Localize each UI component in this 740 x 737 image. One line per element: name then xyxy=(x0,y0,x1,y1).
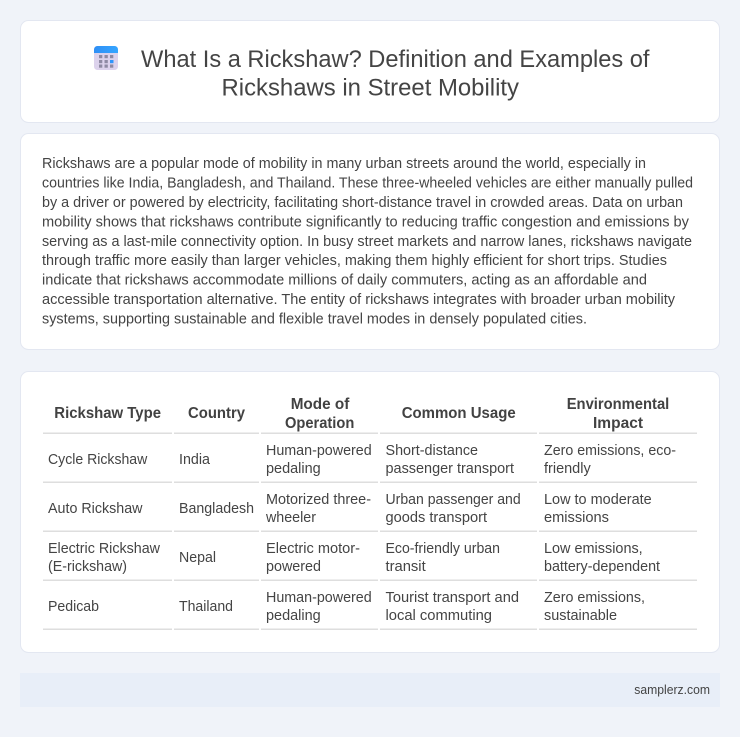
table row: cycle rickshaw: Short-distance xyxy=(386,443,478,459)
table row: pedicab: pedaling xyxy=(266,608,321,624)
panel: description card xyxy=(20,134,720,350)
text block: description: serving as a last-mile connectivity option. In busy street markets and narrow lanes, rickshaws navigate xyxy=(42,234,692,250)
table row: electric rickshaw: Electric Rickshaw xyxy=(48,541,161,557)
table row: pedicab xyxy=(43,590,697,630)
table row: electric rickshaw: Electric motor- xyxy=(266,541,360,557)
text block: description: accessible transportation alternative. The entity of rickshaws integrates with broader urban mobility xyxy=(42,292,676,308)
table row: pedicab: Pedicab xyxy=(48,599,99,615)
table row: cycle rickshaw: Zero emissions, eco- xyxy=(544,443,676,459)
table row: pedicab: Human-powered xyxy=(266,590,372,606)
table row: pedicab: local commuting xyxy=(386,608,492,624)
table row: cycle rickshaw: friendly xyxy=(544,461,592,477)
table row: auto rickshaw xyxy=(43,492,697,532)
table row: pedicab: sustainable xyxy=(544,608,617,624)
text block: description: countries like India, Bangladesh, and Thailand. These three-wheeled vehicles are either manually pulled xyxy=(42,175,693,191)
table row: cycle rickshaw: Human-powered xyxy=(266,443,372,459)
title: Rickshaws in Street Mobility xyxy=(222,74,519,102)
footer bar xyxy=(20,673,720,707)
table header row: Mode of xyxy=(291,396,350,413)
table header row: Operation xyxy=(285,415,354,432)
table row: auto rickshaw: goods transport xyxy=(386,510,487,526)
table row: cycle rickshaw: passenger transport xyxy=(386,461,514,477)
table header row: Environmental xyxy=(567,396,669,413)
table row: cycle rickshaw: Cycle Rickshaw xyxy=(48,452,148,468)
table row: cycle rickshaw: pedaling xyxy=(266,461,321,477)
table row: electric rickshaw: Eco-friendly urban xyxy=(386,541,500,557)
table row: electric rickshaw: transit xyxy=(386,559,426,575)
title: What Is a Rickshaw? Definition and Examples of xyxy=(141,46,650,73)
table row: auto rickshaw: emissions xyxy=(544,510,609,526)
text block: description: through traffic more easily than larger vehicles, making them highly efficient for short trips. Studies xyxy=(42,253,667,269)
table row: pedicab: Zero emissions, xyxy=(544,590,645,606)
table row: cycle rickshaw: India xyxy=(179,452,210,468)
table row: auto rickshaw: Urban passenger and xyxy=(386,492,521,508)
table header row: Rickshaw Type xyxy=(54,405,161,422)
table header row xyxy=(43,396,697,434)
text block: description: by a driver or powered by electricity, facilitating short-distance travel in crowded areas. Data on urban xyxy=(42,195,683,211)
icon: calendar xyxy=(94,46,118,70)
table row: electric rickshaw: (E-rickshaw) xyxy=(48,559,127,575)
text block: description: systems, supporting sustainable and flexible travel modes in densely populated cities. xyxy=(42,312,587,328)
table row: electric rickshaw xyxy=(43,541,697,581)
panel: header card xyxy=(20,20,720,122)
table row: electric rickshaw: powered xyxy=(266,559,321,575)
text block: description: mobility shows that rickshaws contribute significantly to reducing traffic congestion and emissions by xyxy=(42,214,690,230)
table header row: Country xyxy=(188,405,245,422)
table row: electric rickshaw: Nepal xyxy=(179,550,216,566)
text block: description xyxy=(42,156,693,328)
text block: description: Rickshaws are a popular mode of mobility in many urban streets around the world, especially in xyxy=(42,156,646,172)
text block: description: indicate that rickshaws accommodate millions of daily commuters, acting as an affordable and xyxy=(42,273,647,289)
table row: pedicab: Thailand xyxy=(179,599,233,615)
table row: auto rickshaw: Motorized three- xyxy=(266,492,371,508)
table row: electric rickshaw: Low emissions, xyxy=(544,541,643,557)
table row: auto rickshaw: Low to moderate xyxy=(544,492,652,508)
table header row: Impact xyxy=(593,415,644,432)
table row: cycle rickshaw xyxy=(43,443,697,483)
footer source text: samplerz.com xyxy=(634,682,710,697)
table row: auto rickshaw: wheeler xyxy=(265,510,316,526)
table header row: Common Usage xyxy=(402,405,516,422)
table row: electric rickshaw: battery-dependent xyxy=(544,559,660,575)
title xyxy=(141,46,650,102)
panel: table card xyxy=(20,372,720,652)
table row: pedicab: Tourist transport and xyxy=(386,590,519,606)
table row: auto rickshaw: Bangladesh xyxy=(179,501,254,517)
table row: auto rickshaw: Auto Rickshaw xyxy=(48,501,143,517)
